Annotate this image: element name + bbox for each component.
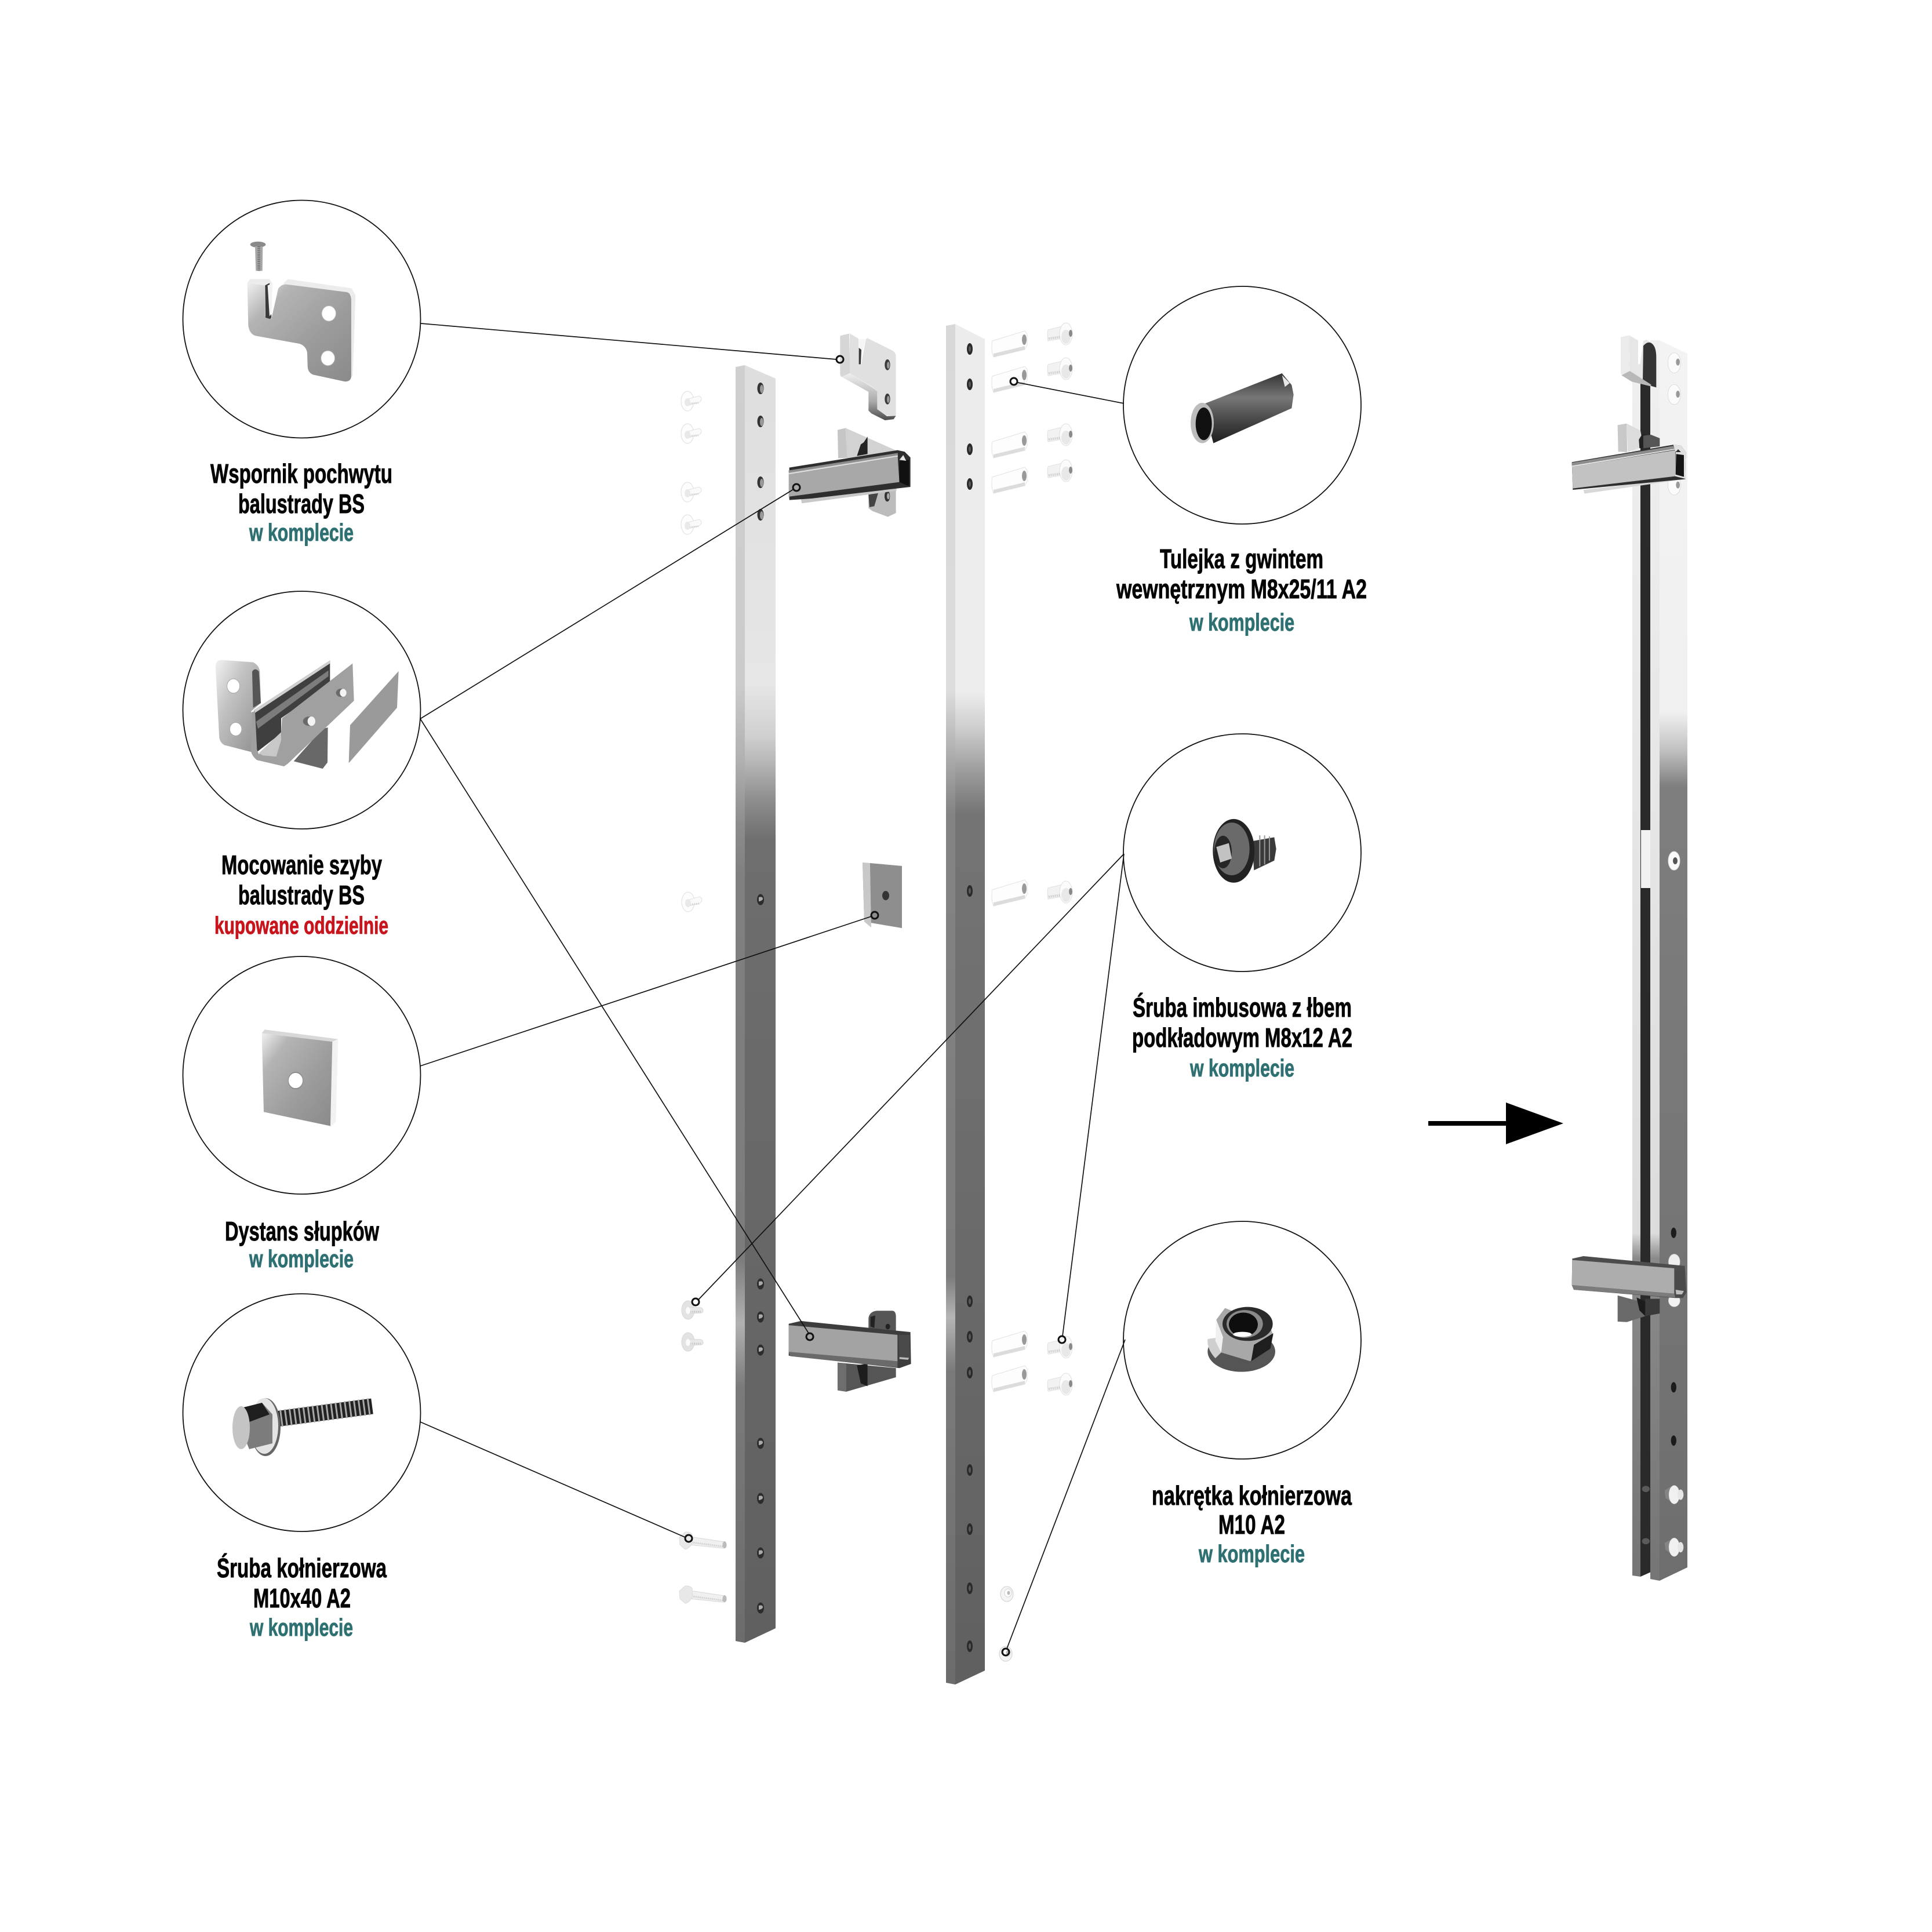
- upper glass clamp bracket: [789, 428, 911, 517]
- text: flange nut label: [1152, 1480, 1352, 1567]
- post B (right exploded bar): [946, 324, 985, 1684]
- text: spacer label: [225, 1216, 379, 1272]
- text: flange bolt label: [217, 1553, 387, 1641]
- text: handrail bracket label: w komplecie: [249, 519, 354, 546]
- text: spacer label: w komplecie: [249, 1245, 354, 1272]
- circle callout: handrail bracket: [183, 201, 421, 438]
- circle callout: post spacer: [183, 956, 421, 1194]
- flange nuts beside post B: [999, 1587, 1013, 1661]
- long flange bolts beside post A: [679, 1532, 727, 1603]
- icon: glass clamp with glass pane: [216, 660, 399, 769]
- leader lines with ring markers: [420, 323, 1125, 1656]
- icon: flange bolt photo: [232, 1398, 372, 1456]
- icon: threaded sleeve photo: [1191, 373, 1294, 443]
- text: flange bolt label: M10x40 A2: [253, 1583, 351, 1613]
- text: threaded sleeve label: [1116, 544, 1367, 636]
- text: flange nut label: nakrętka kołnierzowa: [1152, 1480, 1352, 1511]
- lower glass clamp bracket: [789, 1311, 911, 1392]
- text: handrail bracket label: [210, 459, 392, 546]
- hex screws beside post B: [1047, 323, 1072, 1395]
- circle callout: glass clamp: [183, 591, 421, 829]
- text: glass clamp label: kupowane oddzielnie: [214, 912, 388, 939]
- text: threaded sleeve label: Tulejka z gwintem: [1160, 544, 1323, 574]
- text: flange nut label: w komplecie: [1198, 1540, 1305, 1567]
- arrow pointing to assembled post: [1428, 1103, 1563, 1144]
- text: threaded sleeve label: wewnętrznym M8x25/11 A2: [1116, 574, 1367, 604]
- text: threaded sleeve label: w komplecie: [1189, 609, 1294, 636]
- text: socket screw label: [1132, 992, 1352, 1082]
- text: socket screw label: Śruba imbusowa z łbem: [1133, 992, 1352, 1023]
- icon: square spacer: [262, 1029, 338, 1127]
- icon: handrail bracket with screw: [248, 242, 355, 382]
- text: flange bolt label: w komplecie: [249, 1614, 353, 1641]
- text: socket screw label: podkładowym M8x12 A2: [1132, 1023, 1352, 1053]
- text: socket screw label: w komplecie: [1189, 1054, 1294, 1082]
- circle callout: threaded sleeve: [1123, 286, 1361, 524]
- assembled lower clamp and fasteners: [1572, 1228, 1686, 1556]
- icon: socket button-head screw photo: [1213, 819, 1276, 883]
- top bracket (handrail support): [840, 333, 896, 420]
- text: glass clamp label: balustrady BS: [238, 880, 365, 910]
- small screws beside post A: [681, 391, 703, 1351]
- circle callout: flange bolt: [183, 1294, 421, 1531]
- post A (left exploded bar): [736, 365, 776, 1643]
- text: glass clamp label: Mocowanie szyby: [221, 850, 382, 880]
- text: flange bolt label: Śruba kołnierzowa: [217, 1553, 387, 1583]
- threaded sleeves beside post B: [992, 331, 1027, 1392]
- text: handrail bracket label: balustrady BS: [238, 489, 365, 519]
- text: spacer label: Dystans słupków: [225, 1216, 379, 1246]
- spacer block: [863, 863, 902, 928]
- text: handrail bracket label: Wspornik pochwytu: [210, 459, 392, 489]
- circle callout: flange nut: [1123, 1221, 1361, 1459]
- text: glass clamp label: [214, 850, 388, 939]
- circle callout: socket button-head screw: [1123, 734, 1361, 972]
- assembled top bracket and clamp: [1572, 335, 1686, 495]
- text: flange nut label: M10 A2: [1218, 1509, 1285, 1540]
- icon: flange nut photo: [1207, 1307, 1275, 1372]
- assembled post bars: [1632, 340, 1687, 1581]
